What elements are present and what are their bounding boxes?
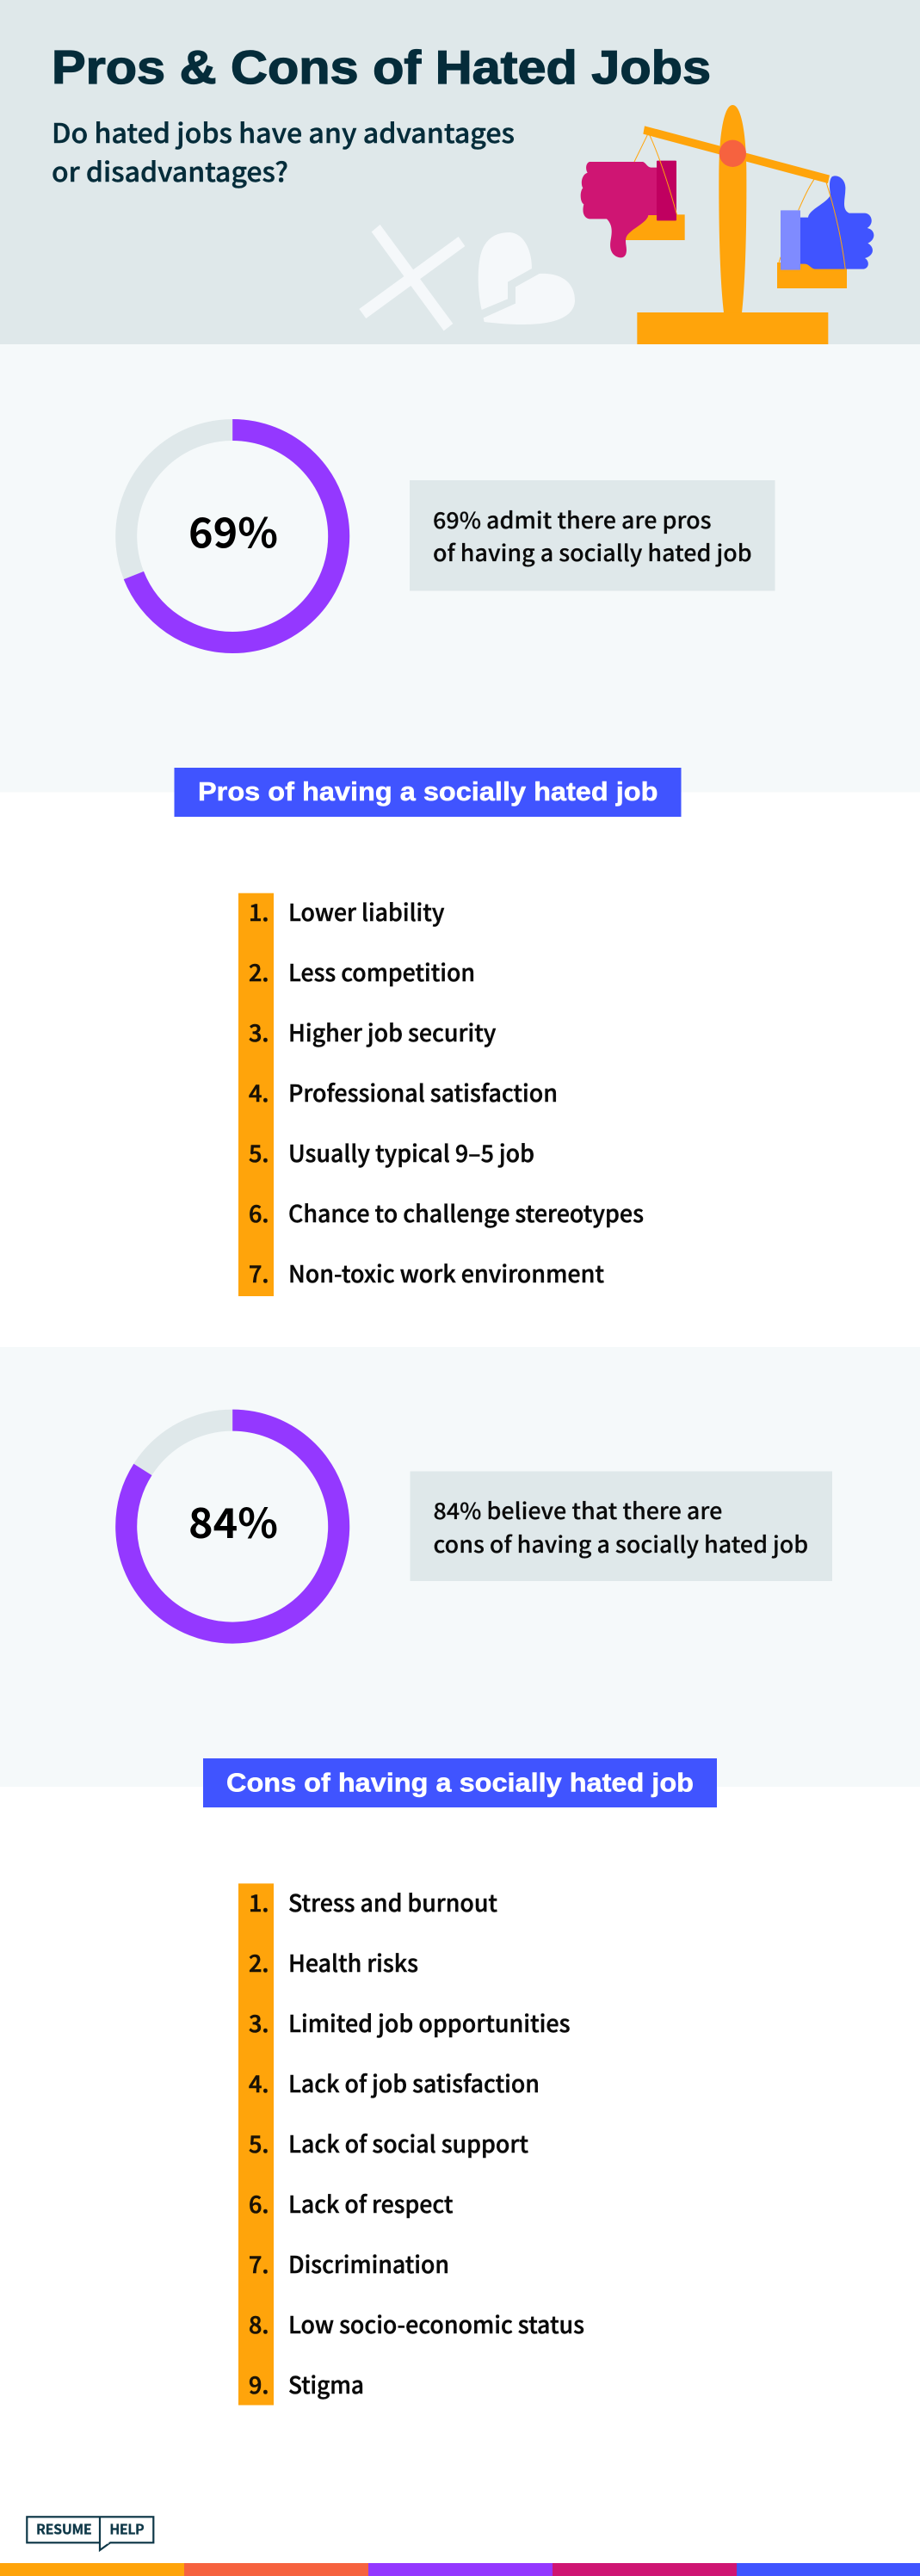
item 4: Professional satisfaction <box>288 1075 558 1109</box>
item 7: Non-toxic work environment <box>288 1256 604 1289</box>
scale pivot <box>719 140 746 167</box>
item 3: Limited job opportunities <box>288 2005 570 2039</box>
heading: pros banner: Pros of having a socially hated job <box>198 776 658 806</box>
item 5: 5. <box>249 1135 269 1169</box>
footer colour bar <box>0 2563 920 2576</box>
donut chart: 84% <box>127 1420 339 1633</box>
heading: cons banner <box>203 1758 717 1807</box>
front strings <box>650 135 845 269</box>
item 3: 3. <box>249 1015 269 1048</box>
callout: 84% <box>410 1472 832 1581</box>
list: cons <box>238 1883 584 2405</box>
item 2: Health risks <box>288 1945 418 1979</box>
callout: 69%: of having a socially hated job <box>433 536 752 568</box>
callout: 69%: 69% admit there are pros <box>433 503 712 535</box>
donut chart: 69% <box>127 430 339 642</box>
item 7: Discrimination <box>288 2246 449 2280</box>
item 5: Lack of social support <box>288 2126 528 2159</box>
item 4: 4. <box>249 2066 269 2099</box>
item 1: Lower liability <box>288 894 445 928</box>
item 6: 6. <box>249 1195 269 1229</box>
item 6: 6. <box>249 2186 269 2220</box>
subtitle: or disadvantages? <box>52 151 288 189</box>
scale post <box>719 105 746 312</box>
donut chart: 69%: 69% <box>188 499 278 559</box>
item 6: Lack of respect <box>288 2186 454 2220</box>
item 1: Stress and burnout <box>288 1885 497 1918</box>
item 7: 7. <box>249 2246 269 2280</box>
donut chart: 84%: 84% <box>188 1490 278 1550</box>
item 4: Lack of job satisfaction <box>288 2066 540 2099</box>
item 9: 9. <box>249 2367 269 2400</box>
heading: cons banner: Cons of having a socially hated job <box>226 1768 694 1798</box>
icon: balance scale with thumbs <box>581 105 874 344</box>
logo: Resume Help: HELP <box>109 2517 145 2538</box>
callout: 84%: 84% believe that there are <box>434 1494 722 1526</box>
panel: cons statistic <box>0 1347 920 1787</box>
title: Pros & Cons of Hated Jobs <box>52 40 711 94</box>
item 5: Usually typical 9–5 job <box>288 1135 534 1169</box>
icon: broken heart <box>479 232 575 324</box>
item 8: Low socio-economic status <box>288 2307 584 2340</box>
callout: 84%: cons of having a socially hated job <box>434 1528 808 1560</box>
thumbs up hand <box>800 176 874 269</box>
scale beam <box>643 126 830 183</box>
scale base <box>637 312 828 344</box>
thumbs down cuff <box>657 161 676 220</box>
item 2: Less competition <box>288 954 475 988</box>
item 1: 1. <box>249 1885 269 1918</box>
number bar <box>238 893 274 1296</box>
item 9: Stigma <box>288 2367 364 2400</box>
panel: header <box>0 0 920 344</box>
item 9 <box>249 2367 364 2400</box>
item 8: 8. <box>249 2307 269 2340</box>
callout: 69% <box>410 480 775 590</box>
list: pros <box>238 893 644 1296</box>
item 3: Higher job security <box>288 1015 497 1048</box>
left pan <box>615 214 685 240</box>
item 2: 2. <box>249 954 269 988</box>
icon: crossed X <box>359 225 465 330</box>
panel: pros statistic <box>0 344 920 792</box>
left pan strings back <box>634 135 814 263</box>
subtitle <box>52 112 515 189</box>
number bar <box>238 1883 274 2405</box>
thumbs up cuff <box>781 210 800 270</box>
item 7: 7. <box>249 1256 269 1289</box>
subtitle: Do hated jobs have any advantages <box>52 112 515 151</box>
thumbs down hand <box>581 162 658 257</box>
logo: Resume Help: RESUME <box>36 2517 92 2538</box>
item 5: 5. <box>249 2126 269 2159</box>
item 2: 2. <box>249 1945 269 1979</box>
heading: pros banner <box>174 768 682 817</box>
item 3: 3. <box>249 2005 269 2039</box>
right pan <box>777 263 847 288</box>
item 1: 1. <box>249 894 269 928</box>
logo: Resume Help <box>27 2517 153 2550</box>
item 4: 4. <box>249 1075 269 1109</box>
item 6: Chance to challenge stereotypes <box>288 1195 644 1229</box>
